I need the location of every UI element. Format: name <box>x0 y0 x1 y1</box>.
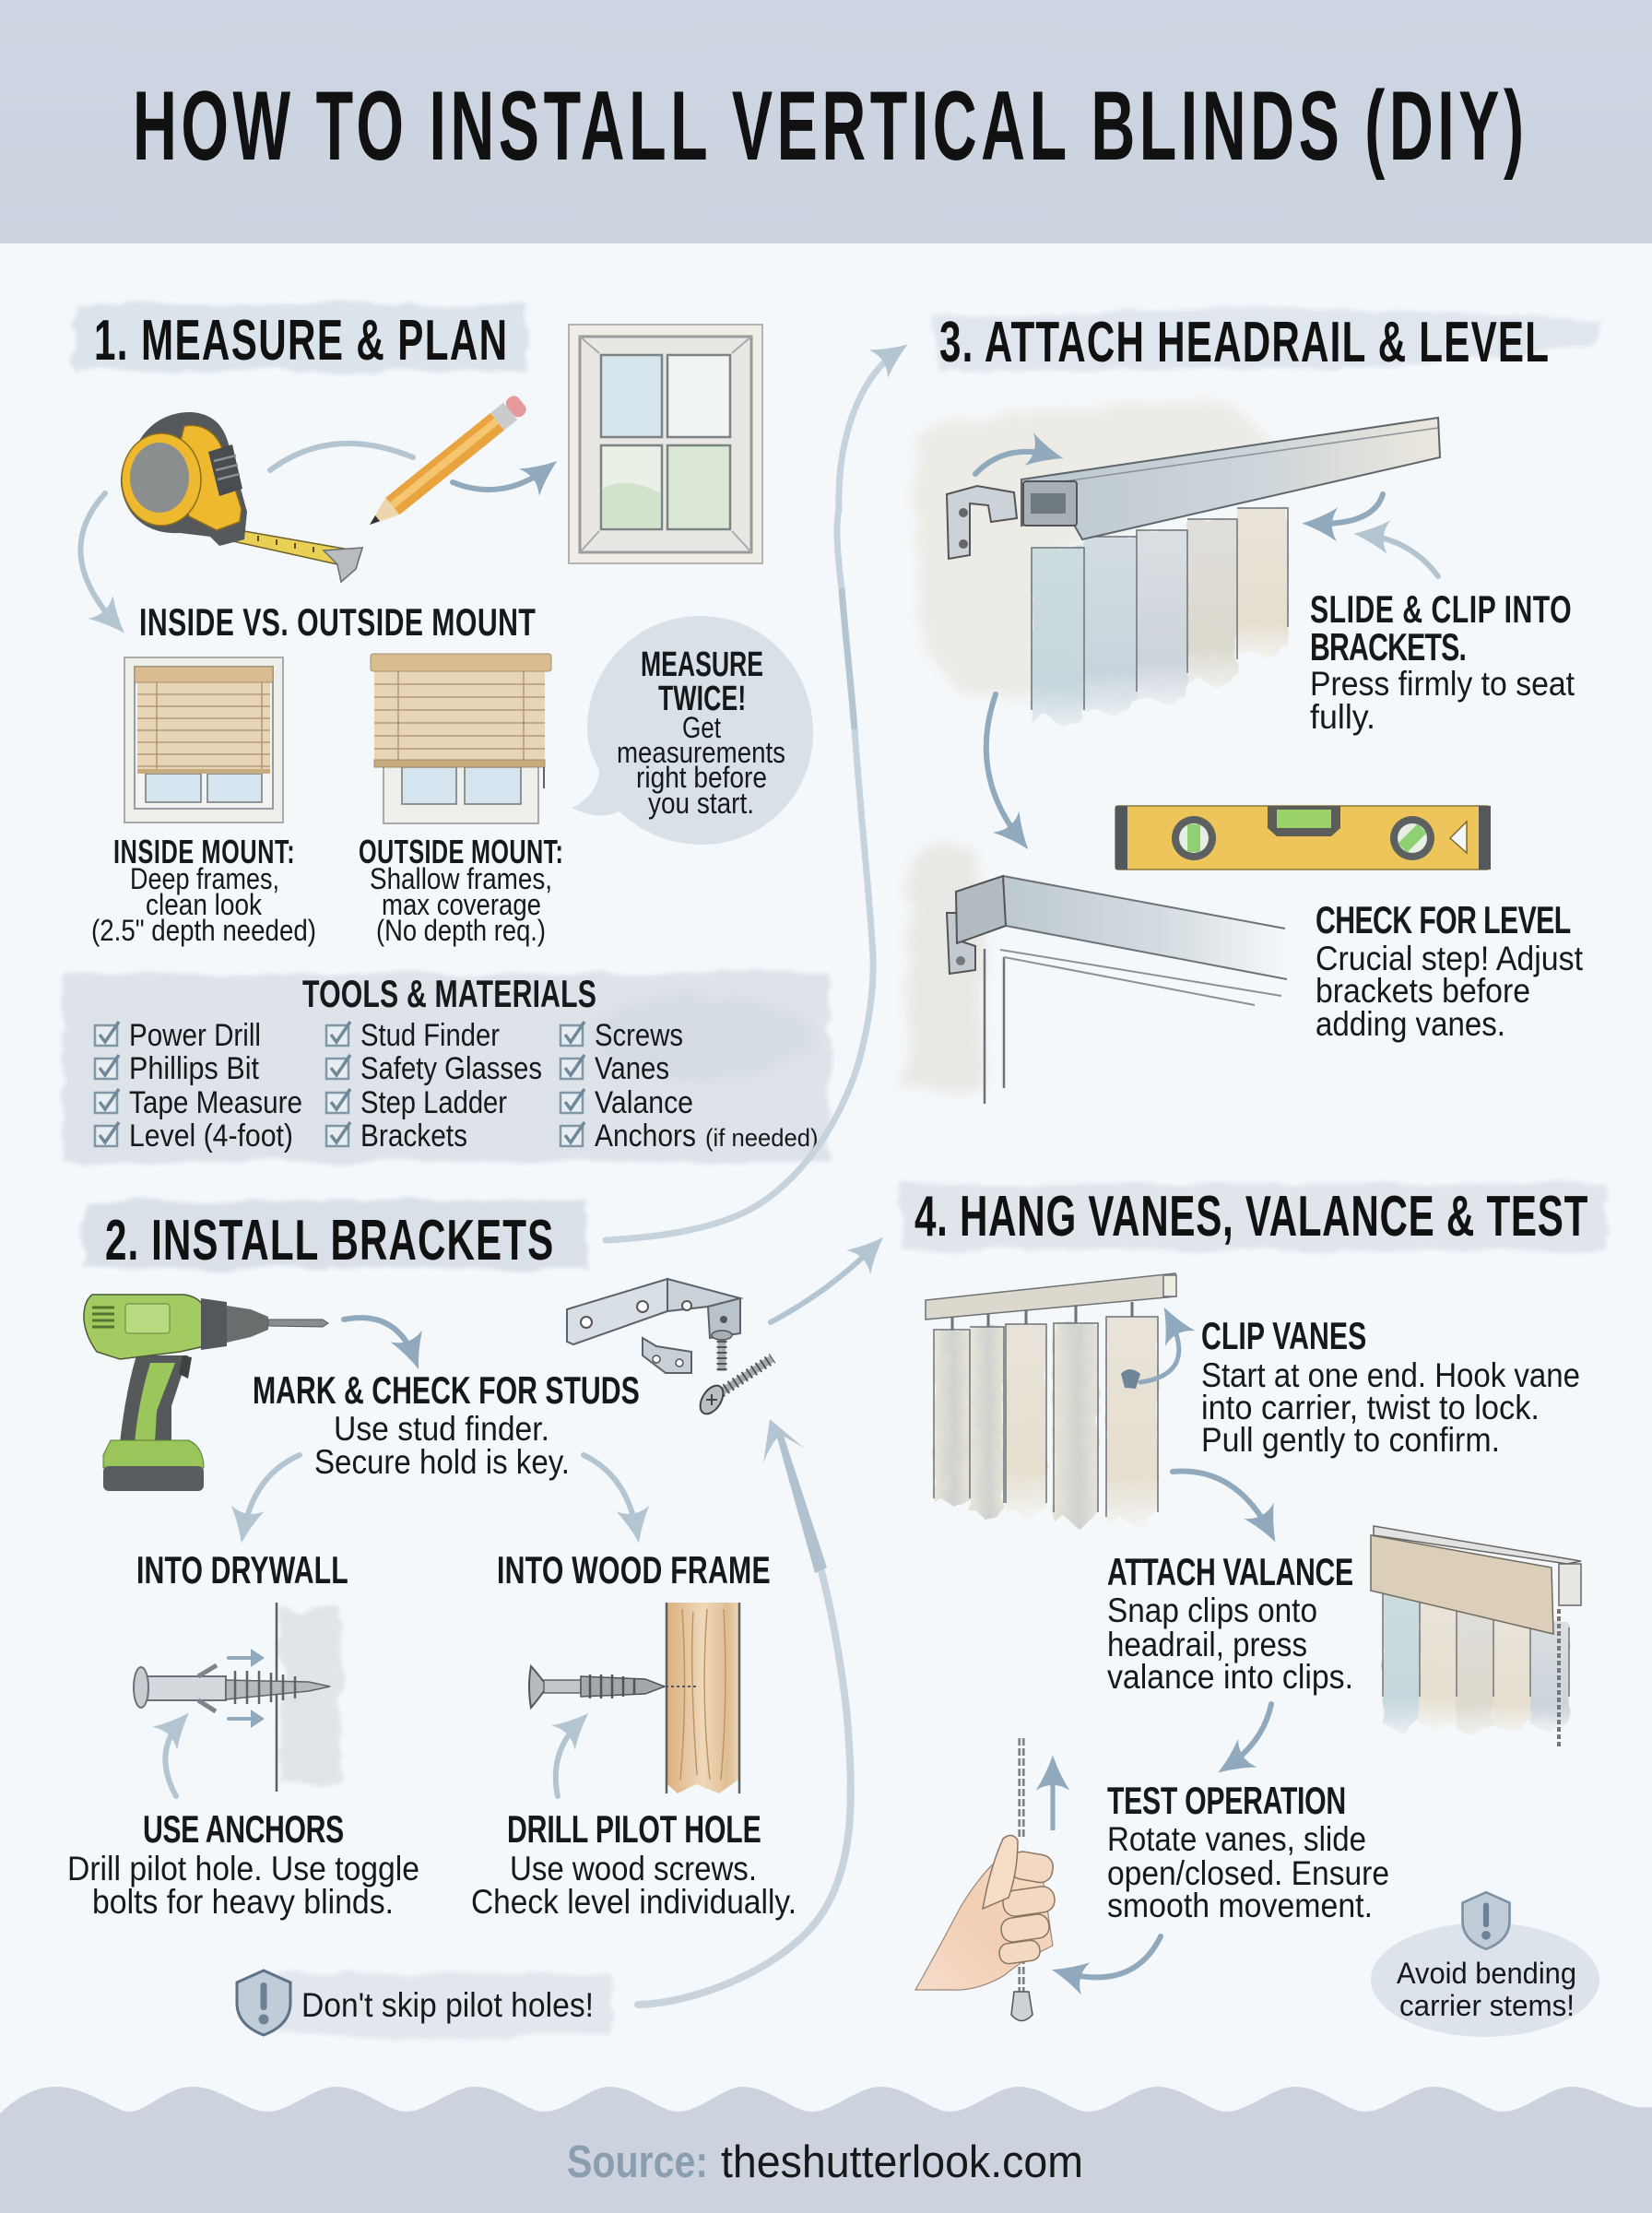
text: use anchors <box>67 1807 419 1921</box>
title banner <box>0 0 1652 243</box>
arrow: pencil to window <box>453 467 549 490</box>
panel: step 4 hang vanes <box>902 1184 1607 2037</box>
arrow: clip twist <box>1140 1317 1179 1382</box>
text: inside mount <box>91 834 316 947</box>
text: mark and check: MARK & CHECK FOR STUDS <box>253 1368 640 1412</box>
text: slide and clip: BRACKETS. <box>1310 625 1467 669</box>
arrow: pilot holes loop back to brackets <box>638 1419 851 2005</box>
heading: step 4: 4. HANG VANES, VALANCE & TEST <box>914 1185 1587 1249</box>
text: check for level: Crucial step! Adjust <box>1316 940 1584 977</box>
checklist column 1 <box>95 1018 302 1154</box>
checklist column 3: (if needed) <box>705 1123 819 1152</box>
icon: warning shield <box>237 1970 290 2035</box>
panel: step 1 measure and plan <box>63 304 830 1162</box>
text: drill pilot hole: DRILL PILOT HOLE <box>507 1807 761 1851</box>
text: check for level: CHECK FOR LEVEL <box>1316 898 1571 941</box>
text: outside mount: (No depth req.) <box>376 914 546 947</box>
checklist column 3: Valance <box>595 1085 693 1120</box>
callout: measure twice: right before <box>636 761 767 794</box>
text: mark and check <box>253 1368 640 1481</box>
checklist column 2: Stud Finder <box>360 1018 500 1053</box>
text: mark and check: Use stud finder. <box>334 1410 549 1448</box>
arrow: drill to marking <box>344 1318 415 1359</box>
panel: tools and materials <box>63 972 830 1162</box>
checklist column 2: Safety Glasses <box>360 1051 542 1086</box>
illustration: leveled headrail <box>908 844 1287 1104</box>
text: inside mount: (2.5" depth needed) <box>91 914 316 947</box>
text: test operation <box>1107 1779 1389 1924</box>
arrow: to test operation <box>1227 1704 1271 1767</box>
text: clip vanes: into carrier, twist to lock. <box>1201 1389 1540 1426</box>
icon: pencil <box>362 394 529 533</box>
checklist column 1: Tape Measure <box>129 1085 302 1120</box>
arrow: tape to pencil <box>270 444 413 470</box>
callout: measure twice: you start. <box>648 787 754 820</box>
text: use anchors: bolts for heavy blinds. <box>92 1883 394 1921</box>
icon: wall anchor <box>134 1603 341 1792</box>
arrow: press rail <box>1313 494 1383 524</box>
text: attach valance: headrail, press <box>1107 1626 1307 1663</box>
text: check for level <box>1316 898 1584 1043</box>
callout: measure twice <box>572 616 813 845</box>
text: inside mount: clean look <box>146 888 263 921</box>
label: into drywall: INTO DRYWALL <box>136 1548 348 1592</box>
arrow: test to hand <box>1062 1936 1161 1977</box>
checklist column 1: Phillips Bit <box>129 1051 259 1086</box>
arrow: anchor callout <box>165 1721 182 1796</box>
text: test operation: smooth movement. <box>1107 1887 1373 1924</box>
arrow: from note to rail <box>1364 535 1438 576</box>
checklist column 3: Vanes <box>595 1051 669 1086</box>
icon: brackets and screws <box>567 1279 773 1418</box>
text: mark and check: Secure hold is key. <box>314 1443 570 1481</box>
callout: pilot holes warning: Don't skip pilot holes! <box>301 1986 594 2024</box>
callout: pilot holes warning <box>237 1970 612 2036</box>
icon: tape measure <box>121 412 362 582</box>
title: HOW TO INSTALL VERTICAL BLINDS (DIY) <box>133 70 1524 181</box>
text: slide and clip: SLIDE & CLIP INTO <box>1310 587 1572 631</box>
panel: step 2 install brackets <box>67 1201 796 2036</box>
checklist column 3: Anchors <box>595 1118 696 1154</box>
text: outside mount <box>359 834 563 947</box>
footer banner <box>0 2087 1652 2213</box>
arrow: to level check <box>986 694 1021 841</box>
icon: warning shield <box>1462 1892 1510 1949</box>
text: drill pilot hole: Check level individually. <box>471 1883 796 1921</box>
text: test operation: TEST OPERATION <box>1107 1779 1346 1822</box>
source credit <box>567 2137 1083 2187</box>
text: slide and clip: fully. <box>1310 698 1375 736</box>
arrow: step 2 to step 4 <box>771 1245 876 1322</box>
arrow: tape to mount comparison <box>80 493 117 625</box>
text: drill pilot hole: Use wood screws. <box>510 1850 757 1888</box>
text: inside mount: INSIDE MOUNT: <box>113 834 295 870</box>
source credit: Source: <box>567 2137 708 2187</box>
text: clip vanes: CLIP VANES <box>1201 1314 1366 1357</box>
text: attach valance <box>1107 1550 1353 1696</box>
text: clip vanes <box>1201 1314 1580 1459</box>
arrow: to valance <box>1173 1472 1270 1533</box>
heading: step 1: 1. MEASURE & PLAN <box>94 309 507 373</box>
text: attach valance: ATTACH VALANCE <box>1107 1550 1353 1593</box>
text: use anchors: Drill pilot hole. Use toggle <box>67 1850 419 1888</box>
illustration: hand pulling chain <box>915 1738 1056 2021</box>
text: clip vanes: Start at one end. Hook vane <box>1201 1356 1580 1394</box>
arrow: step 2 to step 3 <box>606 350 899 1240</box>
callout: measure twice: MEASURE <box>641 644 763 683</box>
heading: step 2: 2. INSTALL BRACKETS <box>105 1209 553 1272</box>
heading: step 3: 3. ATTACH HEADRAIL & LEVEL <box>939 311 1549 374</box>
label: into wood frame: INTO WOOD FRAME <box>497 1548 771 1592</box>
text: outside mount: OUTSIDE MOUNT: <box>359 834 563 870</box>
text: inside mount: Deep frames, <box>130 862 279 895</box>
arrow: pilot hole callout <box>556 1721 581 1796</box>
source credit: theshutterlook.com <box>721 2137 1083 2187</box>
illustration: valance <box>1371 1526 1581 1749</box>
text: slide and clip: Press firmly to seat <box>1310 665 1575 703</box>
text: attach valance: valance into clips. <box>1107 1658 1353 1696</box>
callout: avoid bending <box>1371 1892 1599 2037</box>
panel: step 3 attach headrail <box>908 306 1599 1104</box>
text: drill pilot hole <box>471 1807 796 1921</box>
checklist column 3: Screws <box>595 1018 683 1053</box>
icon: wood frame and screw <box>529 1603 739 1793</box>
arrow: pull up <box>1051 1766 1055 1830</box>
illustration: headrail with vanes <box>913 398 1440 728</box>
checklist column 2 <box>326 1018 542 1154</box>
text: outside mount: Shallow frames, <box>370 862 552 895</box>
text: clip vanes: Pull gently to confirm. <box>1201 1421 1500 1459</box>
text: check for level: adding vanes. <box>1316 1005 1505 1043</box>
callout: measure twice: TWICE! <box>658 678 746 717</box>
icon: inside mount blind <box>124 657 283 822</box>
text: outside mount: max coverage <box>382 888 541 921</box>
icon: window <box>569 325 762 563</box>
callout: avoid bending: Avoid bending <box>1397 1957 1576 1990</box>
subheading: inside vs outside: INSIDE VS. OUTSIDE MOUNT <box>139 600 536 644</box>
text: use anchors: USE ANCHORS <box>143 1807 344 1851</box>
heading: tools: TOOLS & MATERIALS <box>302 972 596 1015</box>
text: check for level: brackets before <box>1316 972 1530 1010</box>
checklist column 2: Step Ladder <box>360 1085 507 1120</box>
callout: avoid bending: carrier stems! <box>1399 1989 1575 2022</box>
checklist column 1: Level (4-foot) <box>129 1118 293 1154</box>
text: attach valance: Snap clips onto <box>1107 1592 1317 1629</box>
arrow: to wood frame <box>584 1455 637 1533</box>
icon: outside mount blind <box>371 654 551 823</box>
arrow: to drywall <box>243 1455 300 1533</box>
text: slide and clip <box>1310 587 1575 736</box>
icon: spirit level <box>1115 806 1491 870</box>
text: test operation: open/closed. Ensure <box>1107 1854 1389 1892</box>
checklist column 2: Brackets <box>360 1118 467 1154</box>
arrow: into bracket <box>975 452 1053 474</box>
callout: measure twice: measurements <box>617 736 785 769</box>
checklist column 1: Power Drill <box>129 1018 261 1053</box>
text: test operation: Rotate vanes, slide <box>1107 1820 1366 1858</box>
checklist column 3 <box>560 1018 819 1154</box>
illustration: vanes on rail <box>926 1273 1176 1529</box>
icon: power drill <box>84 1295 328 1491</box>
callout: measure twice: Get <box>682 711 721 744</box>
